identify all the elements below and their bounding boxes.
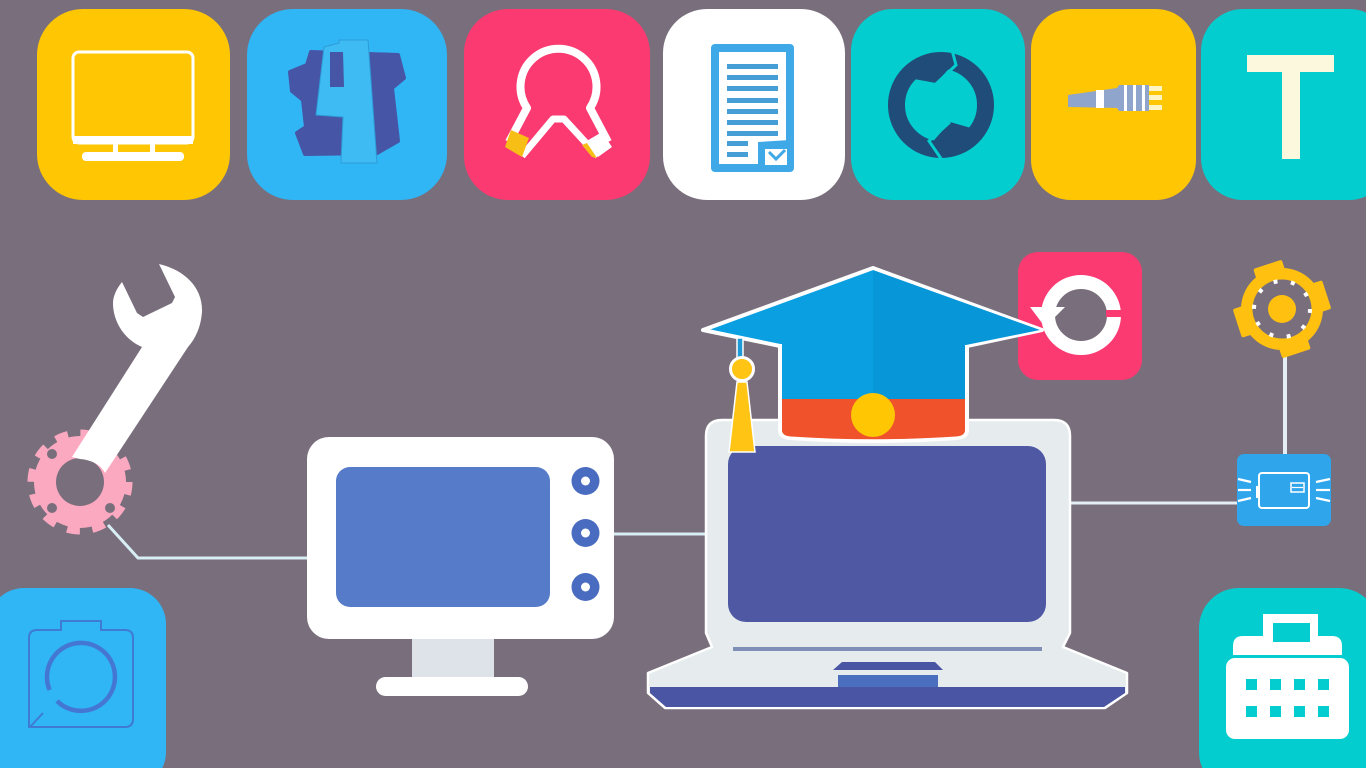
icon: yellow gear [1223,250,1341,368]
connector: monitor to laptop [614,532,707,536]
monitor buttons [572,467,600,601]
icon: pink gear [31,433,129,531]
connector: yellow gear to chip [1283,355,1287,455]
icon tile: teal letter T [1201,9,1366,200]
graduation cap [703,268,1042,452]
connector: gear to monitor [108,525,307,558]
icon tile: teal toolbox [1199,588,1366,768]
icon tile: white document [663,9,845,200]
icon tile: teal cycle arrows [851,9,1025,200]
icon tile: pink ribbon [464,9,650,200]
icon tile: pink refresh [1018,252,1142,380]
icon tile: yellow plug [1031,9,1196,200]
icon tile: blue chip [1237,454,1331,526]
icon tile: yellow monitor [37,9,230,200]
icon: white wrench [72,264,202,473]
laptop [648,420,1127,708]
connector: laptop to chip [1069,502,1238,504]
icon tile: blue number four [247,9,447,200]
desktop monitor [307,437,614,696]
icon tile: blue camera [0,588,166,768]
tassel [729,338,755,452]
